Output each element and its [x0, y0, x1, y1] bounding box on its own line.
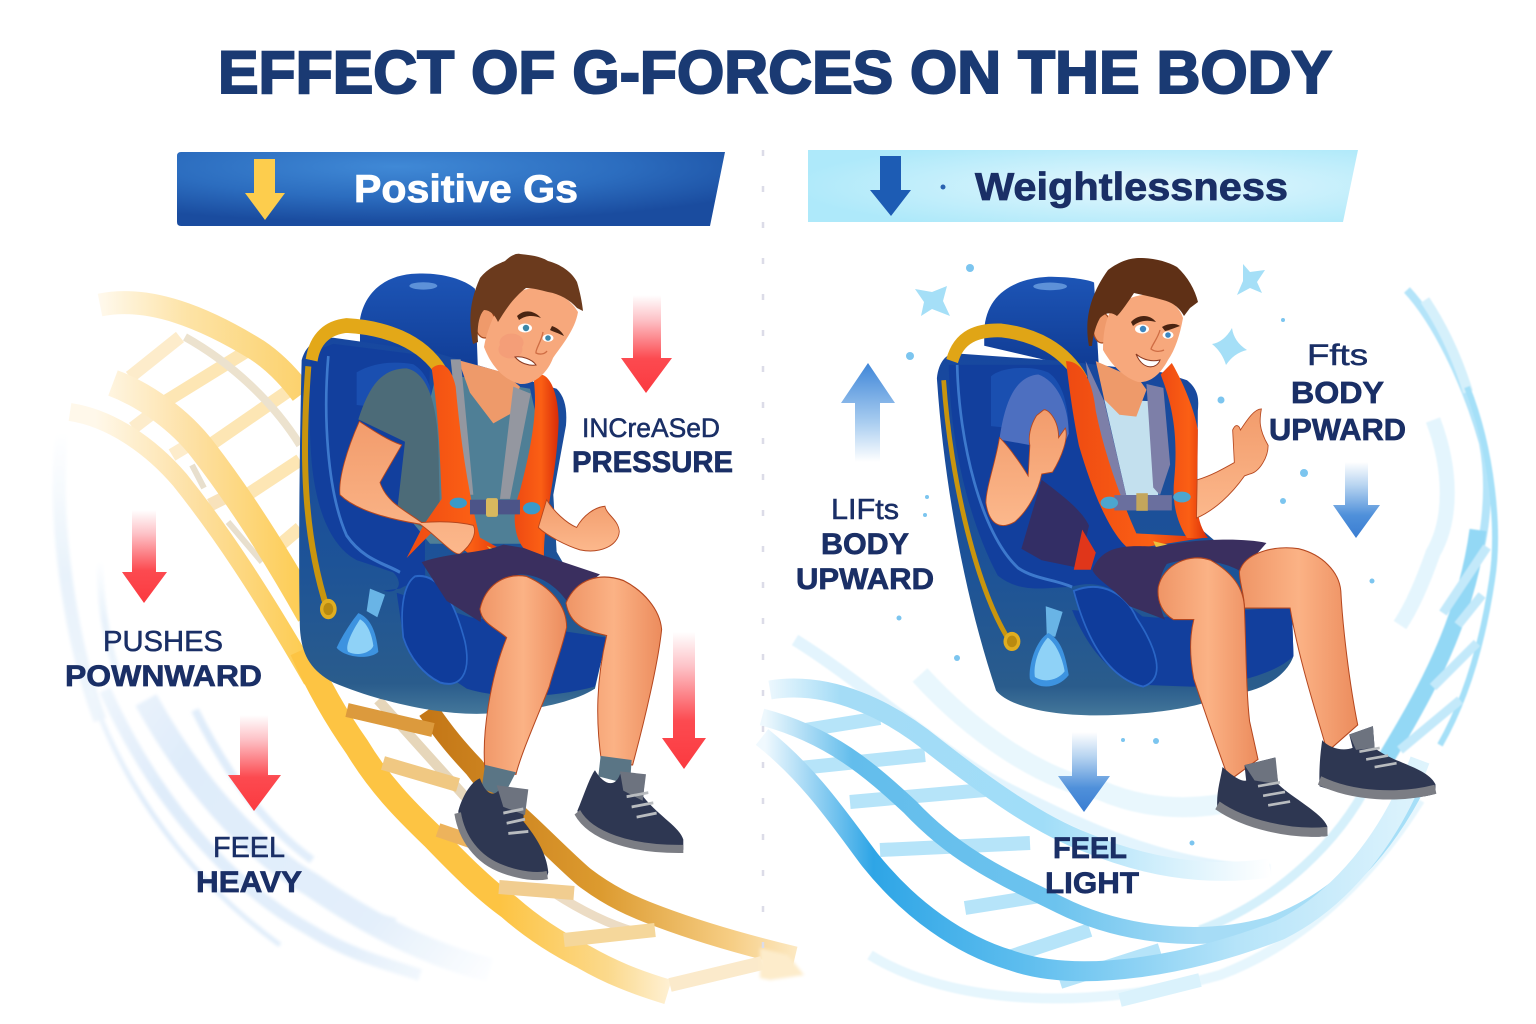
arrow: blue down, bottom [1058, 732, 1110, 812]
upper ties [130, 337, 300, 545]
figure: rider in seat, weightless [937, 277, 1435, 837]
head: smiling rider [1087, 258, 1198, 382]
arrow: red, left upper [122, 510, 167, 603]
label: Ffts body upward: Ffts [1307, 339, 1368, 372]
arm right with raised hand [1196, 409, 1268, 518]
sock far [598, 756, 632, 784]
header text: Positive Gs [354, 168, 578, 211]
rail: middle [113, 383, 310, 615]
rail end fade [760, 948, 804, 980]
harness straps [1066, 361, 1208, 570]
label: Increased pressure: PRESSURE [572, 446, 733, 479]
shoe far [1319, 726, 1435, 799]
label: Pushes downward: PUSHES [103, 626, 223, 658]
shorts [422, 545, 600, 622]
label: Increased pressure [572, 413, 733, 479]
arrow: red, left lower [228, 715, 281, 811]
arrow: red, right of legs [662, 632, 706, 769]
swoosh: pale blue wisps, left panel [59, 430, 490, 975]
label: Ffts body upward: BODY [1291, 375, 1384, 410]
label: Feel heavy: HEAVY [196, 866, 302, 899]
label: Pushes downward: POWNWARD [65, 660, 262, 693]
label: Ffts body upward [1269, 339, 1406, 447]
sleeve [999, 374, 1069, 464]
icon: blue down arrow [870, 156, 911, 216]
arrow: blue down, right [1333, 462, 1380, 538]
neck [458, 360, 520, 423]
leg: near [480, 576, 567, 774]
divider [762, 150, 764, 960]
leg: far [1239, 548, 1358, 752]
label: Feel light: LIGHT [1045, 867, 1139, 900]
arrow: red, right of head [621, 295, 672, 393]
label: Feel heavy: FEEL [213, 832, 285, 864]
label: Lifts body upward: LIFts [831, 494, 899, 526]
roller coaster track: blue [762, 688, 1420, 1000]
grey webbing [451, 359, 531, 499]
leg: near [1158, 558, 1258, 780]
head: worried rider [470, 254, 583, 384]
label: Lifts body upward: BODY [821, 528, 909, 561]
label: Lifts body upward: UPWARD [796, 563, 934, 596]
water bottle [337, 589, 385, 657]
seat [299, 274, 607, 714]
label: Ffts body upward: UPWARD [1269, 412, 1406, 447]
harness tube [305, 325, 442, 617]
ties [800, 718, 1200, 1000]
harness straps [407, 365, 559, 560]
shoe far [577, 770, 683, 850]
rail: main lower section [302, 650, 668, 992]
label: Feel light [1045, 832, 1139, 900]
arm left side with hand [340, 421, 475, 554]
seat [937, 277, 1293, 715]
blue rail: lower [762, 737, 1420, 971]
label: Feel heavy [196, 832, 302, 899]
grey thin inner rail [185, 337, 300, 445]
sock near [482, 765, 516, 797]
stars and droplets [896, 264, 1374, 846]
label: Increased pressure: INCreASeD [582, 413, 720, 443]
shorts [1092, 540, 1266, 620]
roller coaster track: yellow [70, 303, 804, 992]
shirt [1104, 399, 1158, 495]
shoe near [1217, 757, 1327, 837]
header dot [940, 184, 946, 190]
water bottle [1030, 606, 1069, 687]
figure: rider in seat, positive Gs [299, 274, 683, 878]
harness tube [944, 330, 1082, 649]
blue rail: upper [770, 688, 1270, 871]
leg: far [566, 577, 662, 765]
belt and buckle [1100, 492, 1191, 511]
label: Lifts body upward [796, 494, 934, 596]
header: Weightlessness [808, 150, 1358, 222]
label: Pushes downward [65, 626, 262, 693]
header: Positive Gs [177, 152, 725, 226]
belt and buckle [450, 498, 540, 517]
lower ties [347, 710, 762, 985]
jacket webbing [1086, 361, 1170, 499]
rail: dark right section [428, 710, 795, 957]
header text: Weightlessness [975, 166, 1288, 209]
icon: yellow down arrow [245, 159, 285, 220]
label: Feel light: FEEL [1053, 832, 1127, 865]
rail: lower [70, 412, 312, 680]
shoe near [458, 778, 548, 878]
arm left with raised hand [986, 410, 1066, 526]
arm right side [538, 500, 619, 551]
torso [403, 372, 547, 544]
rail: top [100, 303, 302, 394]
shirt sleeve [358, 368, 440, 527]
swoosh: light blue waves, right panel [795, 290, 1495, 998]
neck [1096, 361, 1146, 417]
title: EFFECT OF G-FORCES ON THE BODY [218, 39, 1332, 106]
blue rail: middle [762, 717, 1420, 935]
arrow: blue up [841, 363, 895, 462]
